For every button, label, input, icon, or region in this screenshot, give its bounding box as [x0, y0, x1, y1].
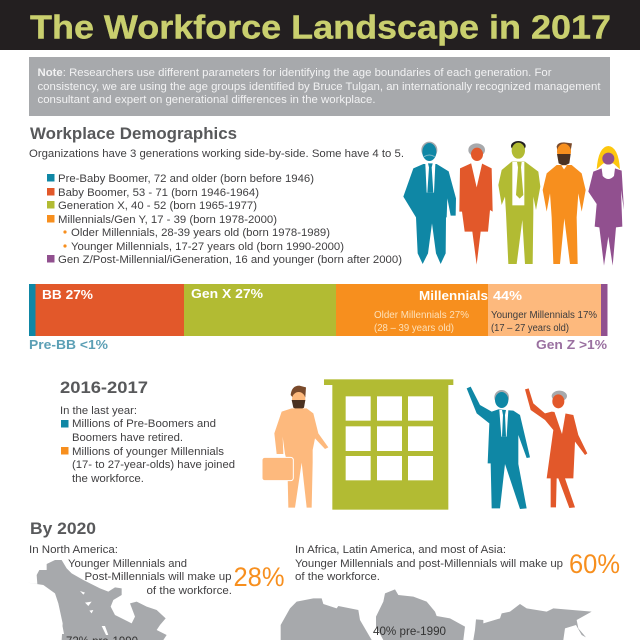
2016-2017 text block: (17- to 27-year-olds) have joined	[72, 459, 235, 471]
2016-2017 text block: In the last year:	[60, 405, 137, 417]
generation legend: Baby Boomer, 53 - 71 (born 1946-1964)	[58, 187, 259, 199]
stacked generation bar chart: Gen X 27%	[191, 286, 263, 301]
label: world pre-1990: 40% pre-1990	[373, 624, 446, 638]
stacked generation bar chart: (28 – 39 years old)	[374, 323, 454, 334]
north america text block: Younger Millennials and	[68, 558, 187, 570]
workforce transition illustration	[262, 379, 587, 510]
world text block: of the workforce.	[295, 571, 380, 583]
figure: gen z	[588, 146, 624, 266]
north america text block: In North America:	[29, 544, 118, 556]
heading: 2016-2017: 2016-2017	[60, 379, 148, 397]
icon: office building	[324, 379, 453, 510]
north america text block: Post-Millennials will make up	[84, 571, 232, 583]
2016-2017 text block: the workforce.	[72, 473, 144, 485]
figure: waving male boomer	[467, 387, 530, 509]
five generations illustration	[403, 141, 624, 266]
note panel: consultant and expert on generational differences in the workplace.	[38, 94, 376, 106]
stat: 28 percent: 28%	[234, 562, 284, 592]
heading: workplace demographics: Workplace Demographics	[30, 125, 237, 143]
generation legend: Younger Millennials, 17-27 years old (born 1990-2000)	[71, 241, 344, 253]
stacked generation bar chart: 44%	[493, 288, 522, 303]
2016-2017 text block: Millions of younger Millennials	[72, 446, 224, 458]
world text block: In Africa, Latin America, and most of Asia:	[295, 544, 506, 556]
figure: baby boomer	[459, 143, 493, 265]
note panel: consistency, we are using the age groups identified by Bruce Tulgan, an internationally recognized management	[38, 81, 601, 93]
generation legend: Gen Z/Post-Millennial/iGeneration, 16 and younger (born after 2000)	[58, 254, 402, 266]
figure: waving female boomer	[525, 388, 587, 508]
stacked generation bar chart: BB 27%	[42, 287, 93, 302]
stacked generation bar chart: Older Millennials 27%	[374, 310, 469, 321]
intro text: Organizations have 3 generations working side-by-side. Some have 4 to 5.	[29, 148, 404, 160]
generation legend: Generation X, 40 - 52 (born 1965-1977)	[58, 200, 257, 212]
figure: millennial	[543, 142, 586, 264]
stat: 60 percent: 60%	[569, 549, 620, 579]
stacked generation bar chart	[29, 284, 608, 336]
2016-2017 text block	[60, 405, 235, 485]
generation legend: Older Millennials, 28-39 years old (born 1978-1989)	[71, 227, 330, 239]
figure: generation x	[498, 141, 540, 264]
note panel: Note: Researchers use different parameters for identifying the age boundaries of each generation. For	[38, 67, 552, 79]
north america text block: of the workforce.	[146, 585, 232, 597]
generation legend: Pre-Baby Boomer, 72 and older (born before 1946)	[58, 173, 314, 185]
title banner	[0, 0, 640, 50]
2016-2017 text block: Boomers have retired.	[72, 432, 183, 444]
label: gen z share: Gen Z >1%	[536, 337, 607, 352]
2016-2017 text block: Millions of Pre-Boomers and	[72, 418, 216, 430]
north america text block	[29, 544, 232, 597]
stacked generation bar chart: (17 – 27 years old)	[491, 323, 569, 334]
map: africa, latin america and asia	[281, 589, 592, 640]
stacked generation bar chart: Younger Millennials 17%	[491, 310, 597, 321]
label: pre-baby boomer share: Pre-BB <1%	[29, 337, 108, 352]
figure: pre-baby boomer	[403, 142, 456, 264]
world text block: Younger Millennials and post-Millennials will make up	[295, 558, 563, 570]
world text block	[295, 544, 563, 583]
heading: by 2020: By 2020	[30, 520, 96, 538]
note panel	[29, 57, 610, 116]
stacked generation bar chart: Millennials	[419, 288, 488, 303]
map: north america	[27, 560, 167, 640]
generation legend: Millennials/Gen Y, 17 - 39 (born 1978-2000)	[58, 214, 277, 226]
generation legend	[47, 173, 402, 266]
title banner: The Workforce Landscape in 2017	[30, 10, 611, 46]
figure: young millennial with briefcase	[262, 386, 328, 508]
